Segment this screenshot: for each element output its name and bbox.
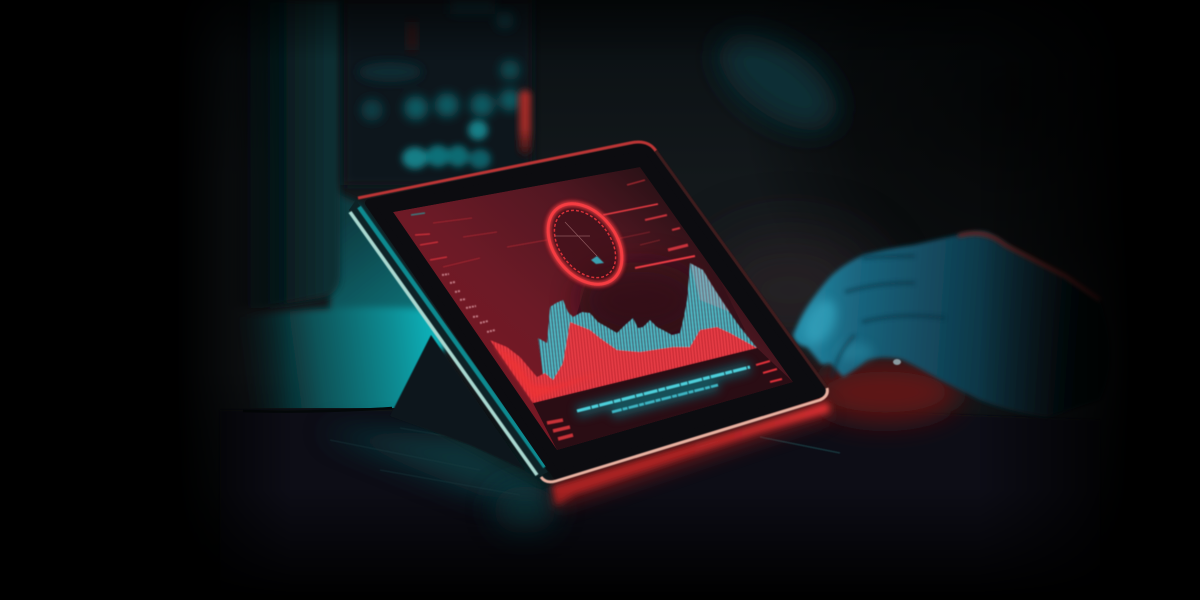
red reflection near cable: [245, 416, 340, 418]
photo scene: tablet with red dashboard on a dark desk: [212, 0, 1100, 556]
tablet right dim edge: [656, 151, 827, 388]
cable on the desk: [243, 408, 392, 412]
labels next to the ring: [603, 204, 695, 268]
hand: [793, 231, 1110, 417]
tablet top red edge: [358, 142, 656, 198]
teal streak on right of desk: [760, 437, 840, 453]
tablet: [349, 142, 827, 482]
vignette right: [980, 0, 1200, 600]
blurred cup on the left: [228, 0, 340, 308]
vignette left: [0, 0, 290, 600]
vignette bottom: [0, 490, 1200, 600]
stand of the tablet: [390, 335, 525, 470]
tablet rear cover band: [349, 200, 548, 477]
shadow on the upper right of the room: [700, 0, 1200, 380]
dim lines and side labels: [411, 180, 782, 439]
blurred monitor with teal lights: [344, 0, 532, 185]
tablet body: [369, 146, 824, 476]
blurred teal shape at the top right: [703, 15, 853, 149]
vignette top: [0, 0, 1200, 60]
tablet left silver edge: [350, 212, 537, 475]
bar chart: red and teal striped area: [490, 263, 757, 403]
tablet bottom bright edge: [541, 388, 827, 482]
tablet left teal edge: [359, 207, 545, 467]
red light below the tablet and hand: [552, 362, 960, 512]
lower desk surface: [220, 410, 1100, 600]
ring gauge: [542, 198, 628, 290]
grey and red light on the far desk: [705, 235, 875, 345]
teal text strip: [577, 367, 750, 413]
teal surface behind the tablet: [258, 194, 447, 408]
tablet display: [393, 167, 793, 450]
